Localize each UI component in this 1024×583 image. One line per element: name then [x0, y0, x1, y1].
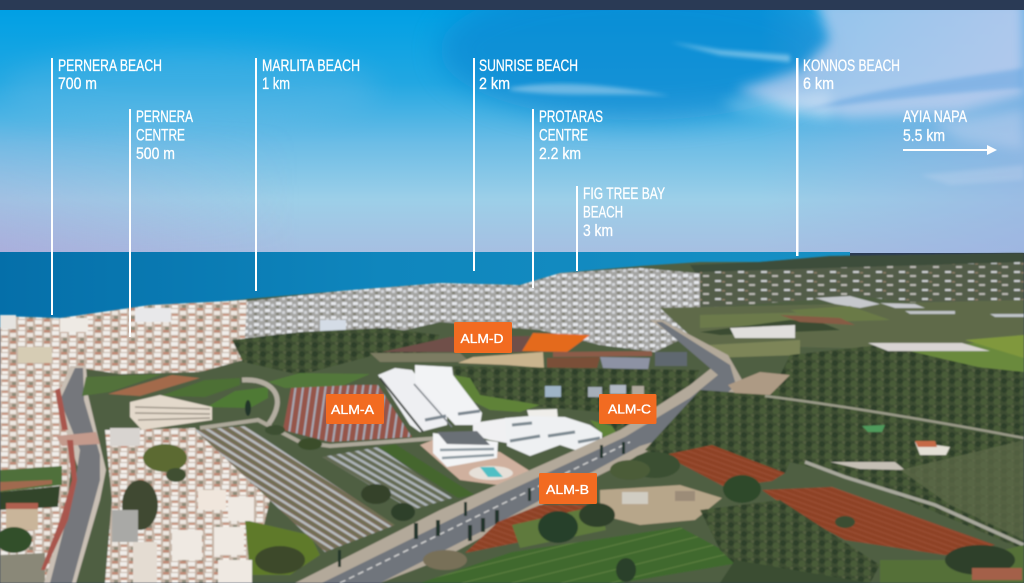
town: lower left houses — [105, 428, 320, 583]
label: ALM-B: ALM-B — [546, 482, 589, 497]
red field lower — [762, 487, 995, 555]
label: ALM-C — [599, 394, 656, 424]
distance line: Konnos Beach — [796, 57, 900, 256]
red field bottom — [465, 505, 588, 553]
distance line: Konnos Beach: 6 km — [803, 75, 834, 93]
ALM-D field and orange parcel — [370, 333, 687, 370]
white villas — [378, 365, 602, 456]
distance line: Protaras Centre: 2.2 km — [539, 145, 581, 163]
land base — [0, 253, 1024, 583]
houses near ALM-C — [453, 375, 644, 446]
distance line: Pernera Beach: 700 m — [58, 75, 97, 93]
label: ALM-C: ALM-C — [608, 402, 651, 416]
red field upper — [664, 445, 785, 487]
vineyard field ALM-A — [283, 385, 412, 442]
solar field large — [195, 426, 395, 552]
distance line: Pernera Centre: CENTRE — [136, 126, 185, 144]
distant hill — [690, 253, 1024, 300]
distance line: Fig Tree Bay Beach: FIG TREE BAY — [583, 185, 665, 203]
Ayia Napa direction arrow: 5.5 km — [903, 127, 945, 145]
sky — [0, 0, 1024, 253]
label: ALM-A: ALM-A — [331, 402, 374, 417]
label: ALM-A — [326, 394, 384, 424]
plaza and clubhouse — [420, 431, 550, 486]
top bar — [0, 0, 1024, 10]
distance line: Sunrise Beach — [473, 57, 578, 271]
label: ALM-B — [539, 473, 597, 504]
road: left — [41, 366, 106, 583]
green and brown fields — [82, 373, 440, 446]
cypress trees — [338, 442, 625, 567]
distance line: Protaras Centre — [532, 108, 603, 288]
distance line: Pernera Beach — [51, 57, 162, 315]
road: main road — [295, 320, 745, 583]
distance line: Sunrise Beach: SUNRISE BEACH — [479, 57, 578, 75]
aerial landscape — [0, 253, 1024, 583]
yard sheds — [622, 491, 695, 504]
trees by fields — [245, 400, 415, 521]
distance line: Fig Tree Bay Beach: BEACH — [583, 204, 623, 222]
distance line: Pernera Centre: PERNERA — [136, 108, 193, 126]
vegetation behind fields — [232, 328, 440, 375]
Ayia Napa direction arrow: AYIA NAPA — [903, 108, 967, 126]
distance line: Sunrise Beach: 2 km — [479, 75, 510, 93]
label: ALM-D: ALM-D — [460, 331, 504, 346]
green field bottom — [420, 527, 745, 583]
lower vegetation — [423, 452, 1024, 583]
far town and right hinterland — [240, 262, 1024, 358]
sea — [0, 252, 850, 327]
distance line: Marlita Beach: 1 km — [262, 75, 290, 93]
dirt yard — [600, 485, 722, 525]
distance line: Pernera Beach: PERNERA BEACH — [58, 57, 162, 75]
left town — [0, 300, 346, 583]
solar field small — [322, 447, 452, 510]
distance line: Protaras Centre: CENTRE — [539, 126, 588, 144]
distance line: Marlita Beach: MARLITA BEACH — [262, 57, 360, 75]
label: ALM-D — [454, 322, 512, 353]
distance line: Fig Tree Bay Beach: 3 km — [583, 222, 613, 240]
hedge — [378, 444, 475, 498]
Ayia Napa direction arrow — [903, 108, 997, 155]
distance line: Protaras Centre: PROTARAS — [539, 108, 603, 126]
building — [130, 395, 212, 430]
distance line: Konnos Beach: KONNOS BEACH — [803, 57, 900, 75]
right side greenery — [645, 335, 1024, 550]
distance line: Fig Tree Bay Beach — [576, 185, 665, 271]
distance line: Marlita Beach — [255, 57, 360, 291]
green belt — [450, 366, 700, 440]
distance line: Pernera Centre — [129, 108, 193, 337]
distance line: Pernera Centre: 500 m — [136, 145, 175, 163]
